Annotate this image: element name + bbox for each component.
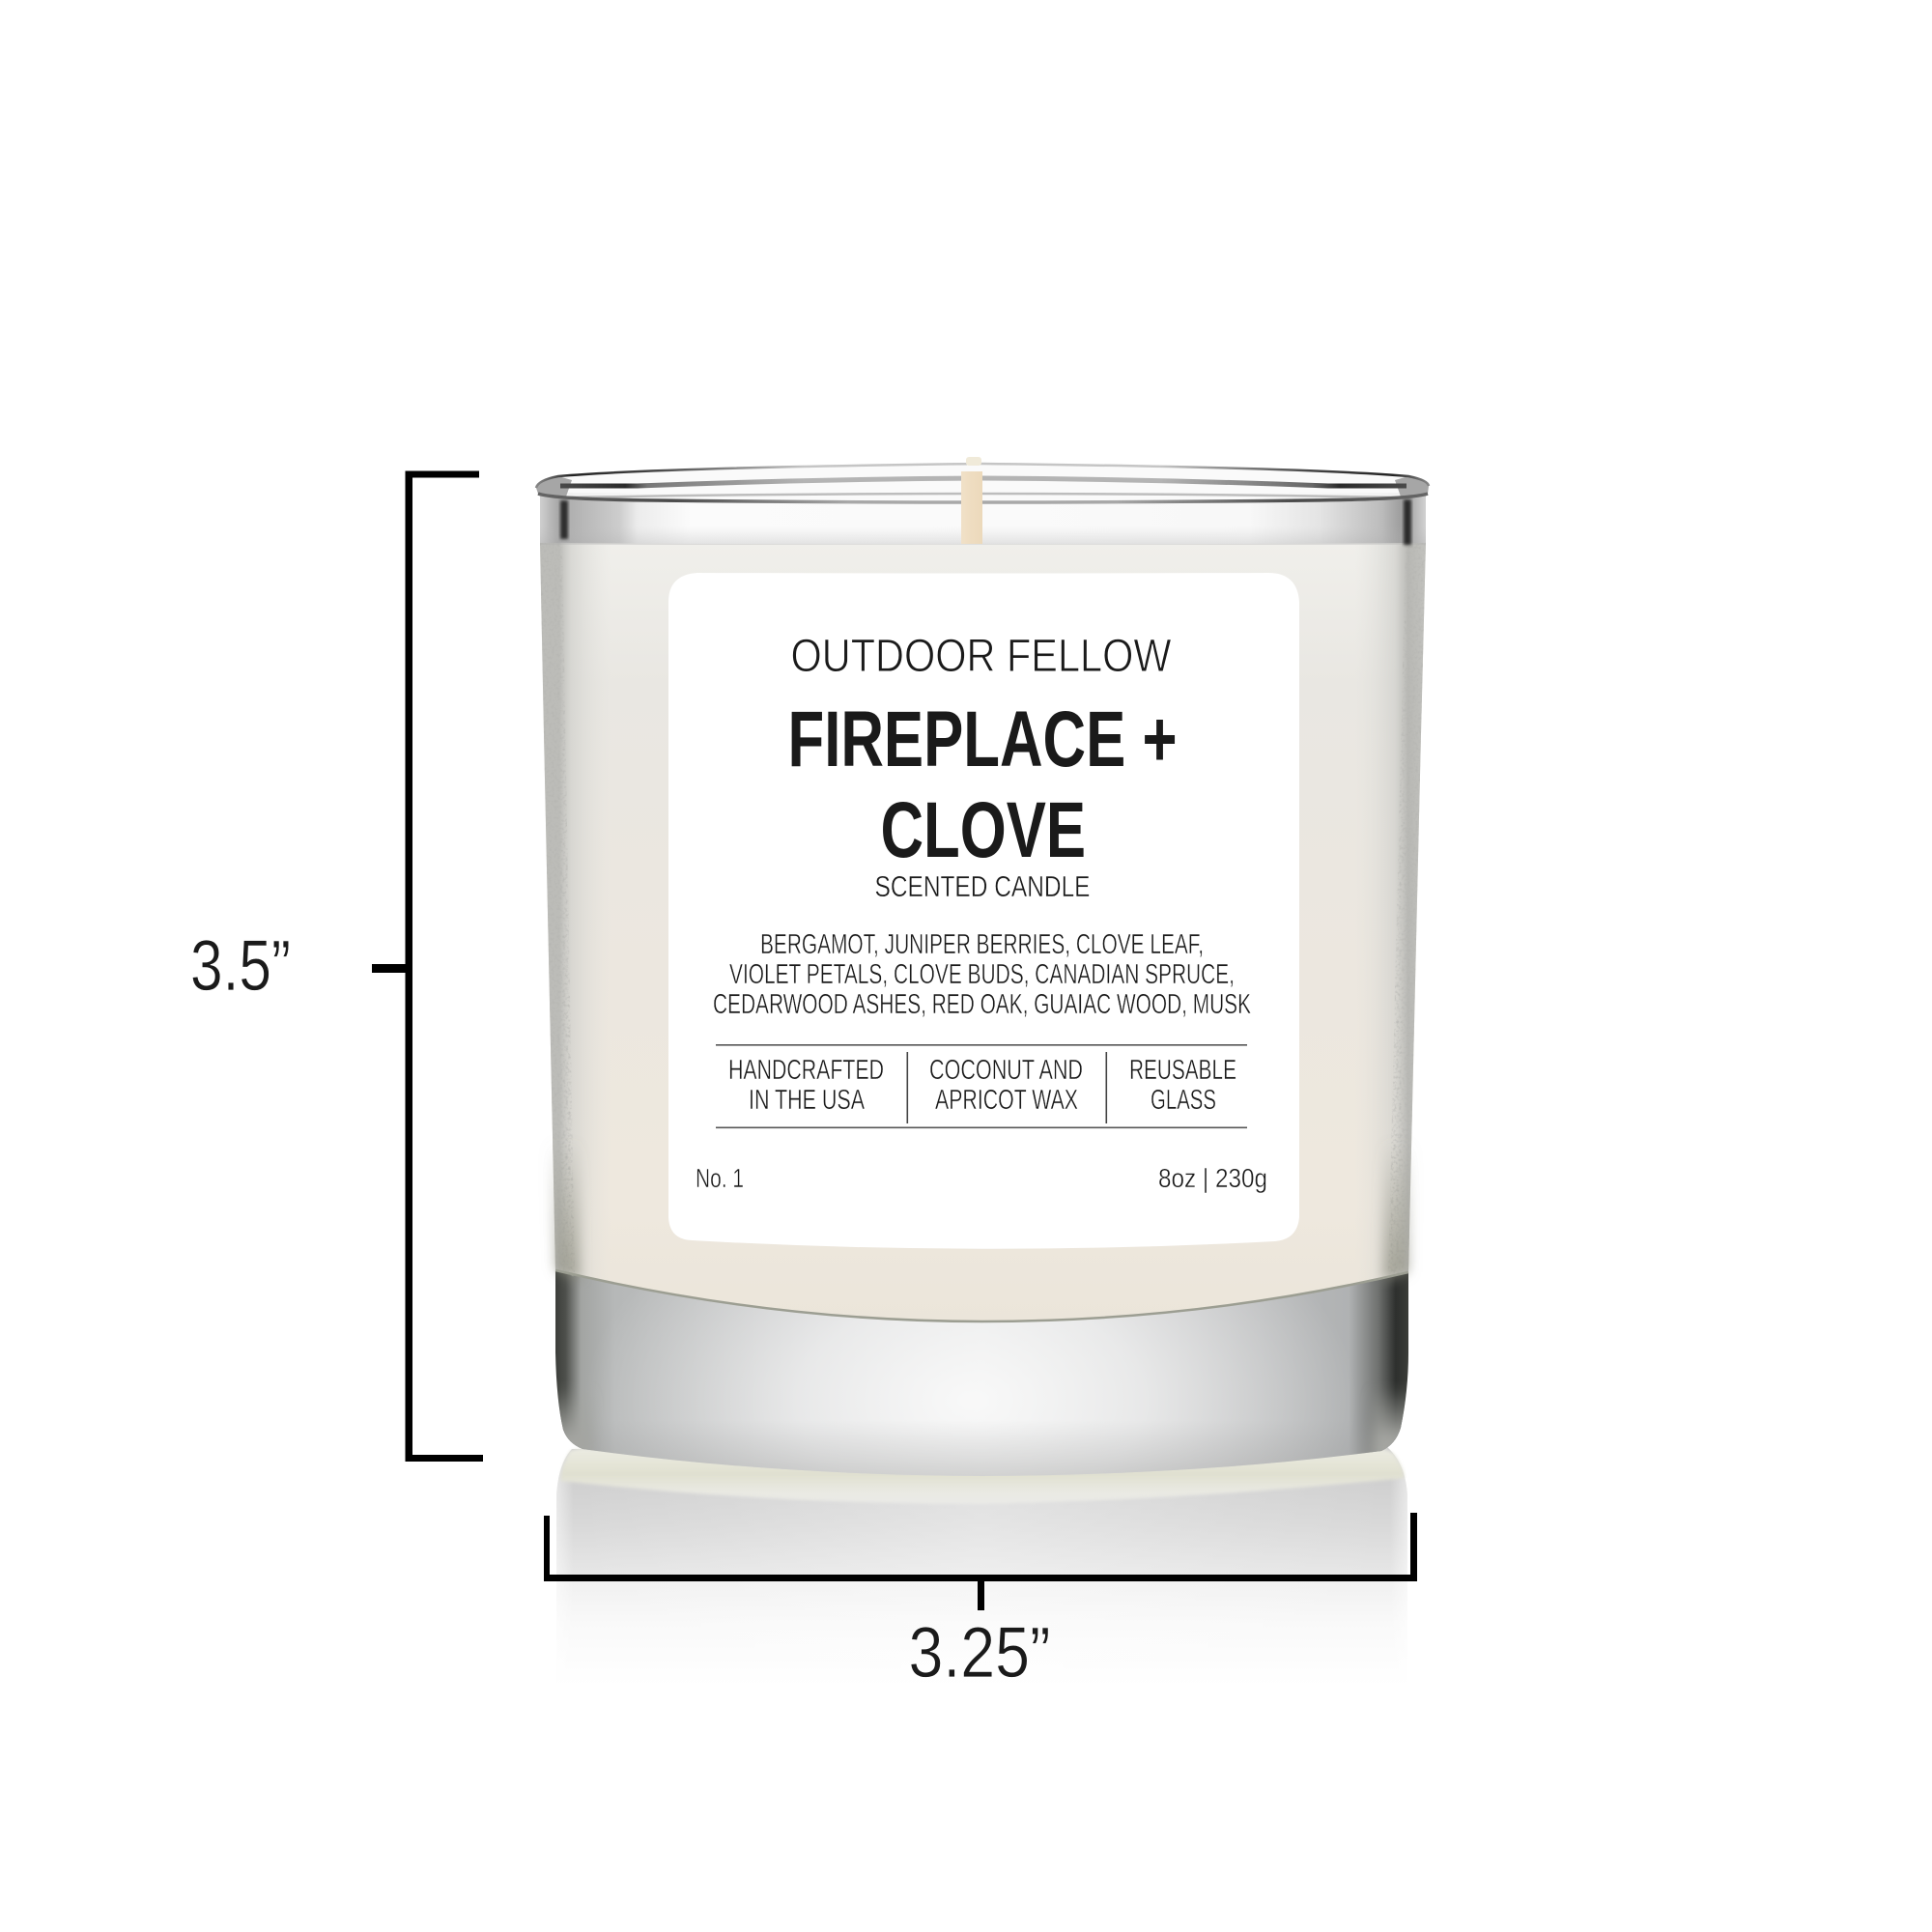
feature: wax: COCONUT AND — [929, 1055, 1083, 1086]
feature: handcrafted — [728, 1055, 884, 1116]
scent notes: VIOLET PETALS, CLOVE BUDS, CANADIAN SPRUCE, — [729, 959, 1235, 990]
height value: 3.5” — [190, 925, 291, 1006]
scent title — [788, 696, 1177, 874]
feature: handcrafted: IN THE USA — [749, 1085, 865, 1116]
feature: wax — [929, 1055, 1083, 1116]
label — [668, 573, 1299, 1249]
feature: glass: GLASS — [1151, 1085, 1216, 1116]
glass rim — [536, 464, 1429, 504]
wooden wick — [961, 457, 982, 544]
width value: 3.25” — [908, 1612, 1051, 1692]
candle product photo — [536, 457, 1429, 1686]
feature: glass: REUSABLE — [1129, 1055, 1236, 1086]
scent notes: BERGAMOT, JUNIPER BERRIES, CLOVE LEAF, — [760, 929, 1204, 960]
height bracket — [372, 471, 483, 1462]
width bracket — [544, 1513, 1417, 1610]
glass base — [551, 1265, 1415, 1483]
number: No. 1 — [696, 1163, 744, 1193]
weight: 8oz | 230g — [1158, 1163, 1267, 1193]
feature: wax: APRICOT WAX — [935, 1085, 1078, 1116]
infographic canvas — [193, 457, 1430, 1677]
features table — [716, 1044, 1247, 1128]
brand name: OUTDOOR FELLOW — [790, 631, 1172, 682]
product type: SCENTED CANDLE — [875, 869, 1090, 903]
table reflection of the jar — [556, 1447, 1407, 1686]
wax fill — [540, 543, 1426, 1321]
scent title: CLOVE — [881, 786, 1086, 874]
scent notes: CEDARWOOD ASHES, RED OAK, GUAIAC WOOD, MUSK — [713, 989, 1251, 1020]
scent title: FIREPLACE + — [788, 696, 1177, 783]
feature: glass — [1129, 1055, 1236, 1116]
feature: handcrafted: HANDCRAFTED — [728, 1055, 884, 1086]
upper clear glass — [540, 493, 1426, 545]
scent notes — [713, 929, 1251, 1020]
